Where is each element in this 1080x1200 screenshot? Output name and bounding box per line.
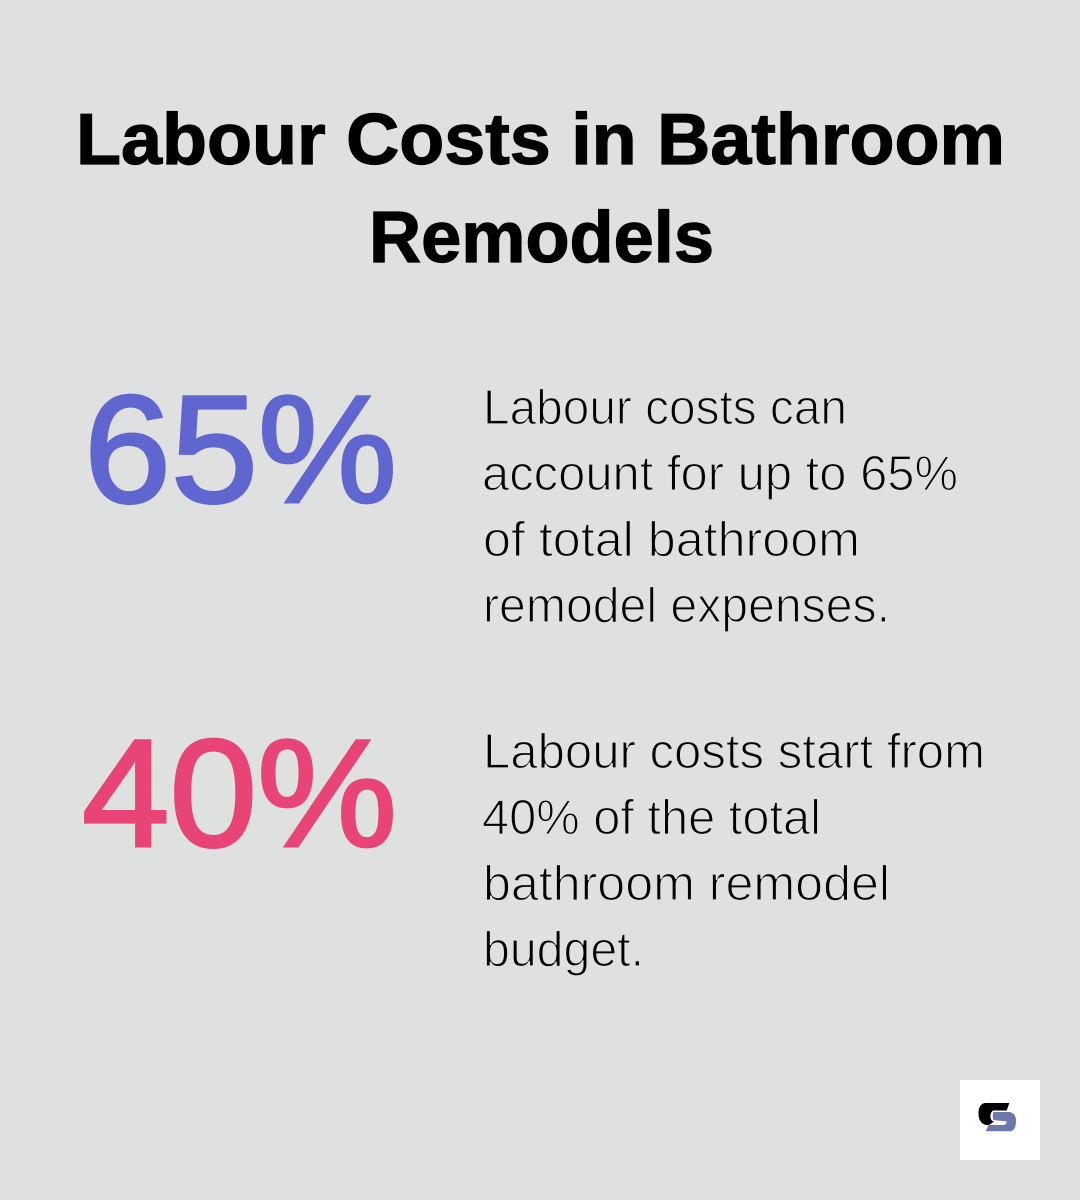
title: Remodels [369, 198, 714, 278]
stat: 65% [84, 364, 958, 633]
stat description: 40%: 40% of the total [482, 791, 821, 845]
stat: 40% [82, 708, 985, 977]
stat number: 65%: 65% [84, 364, 397, 535]
stat description: 40%: bathroom remodel [483, 857, 890, 911]
stat description: 40% [482, 725, 985, 977]
stat description: 65%: Labour costs can [483, 381, 847, 435]
stat description: 65%: account for up to 65% [482, 447, 958, 501]
stat description: 40%: budget. [483, 923, 644, 977]
stat description: 40%: Labour costs start from [483, 725, 985, 779]
logo [960, 1080, 1040, 1160]
title: Labour Costs in Bathroom [76, 100, 1005, 180]
stat description: 65% [482, 381, 958, 633]
title [76, 100, 1005, 278]
stat number: 40%: 40% [82, 708, 397, 879]
stat description: 65%: of total bathroom [483, 513, 860, 567]
stat description: 65%: remodel expenses. [483, 579, 890, 633]
